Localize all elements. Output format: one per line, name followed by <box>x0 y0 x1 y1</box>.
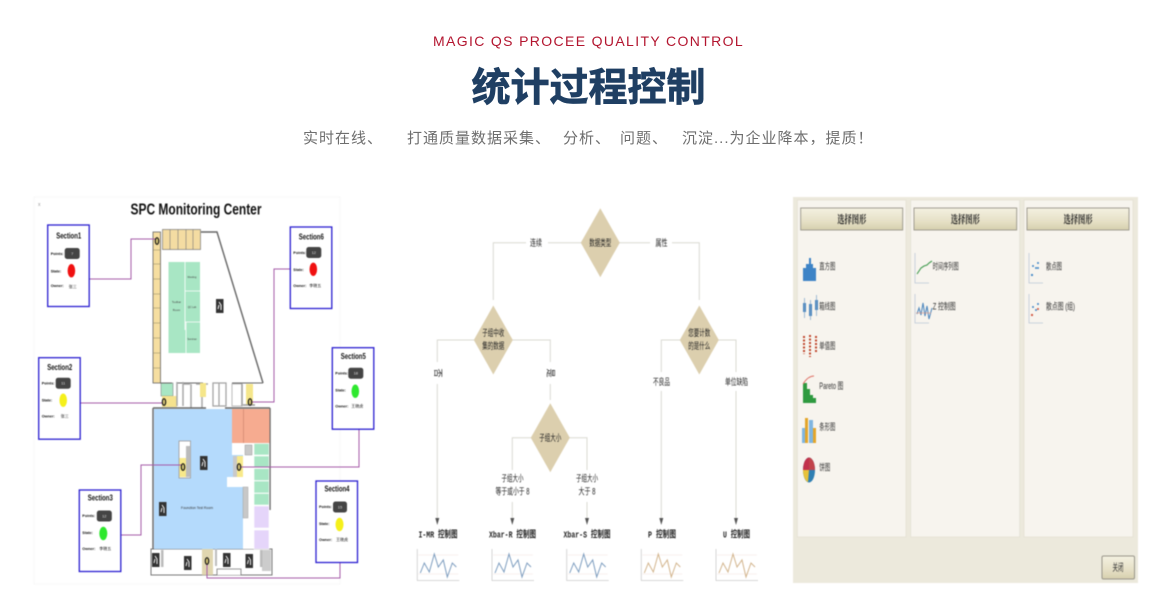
card: Section6: 12 <box>312 250 317 255</box>
icon: individual value plot <box>804 335 816 357</box>
icon: Pareto chart <box>803 383 816 403</box>
chart titles: U 控制图 <box>723 528 750 540</box>
card: Section3: Points: <box>82 514 95 518</box>
tagline: 沉淀...为企业降本，提质！ <box>682 129 874 147</box>
main title: 统计过程控制 <box>471 67 706 110</box>
lower floor <box>151 549 272 575</box>
card: Section2: Points: <box>42 382 55 386</box>
card: Section3: Section3 <box>88 492 113 502</box>
panel: SPC monitoring center <box>34 197 374 584</box>
card: Section1: Owner: <box>51 284 64 288</box>
card: Section6: Points: <box>293 251 306 255</box>
card: Section5: State: <box>335 389 346 393</box>
card: Section4: Points: <box>319 505 332 509</box>
icon: box plot <box>803 295 818 320</box>
column: distribution charts: 直方图 <box>819 260 835 272</box>
decision labels <box>433 237 748 496</box>
decision diamonds <box>474 208 719 472</box>
column: scatter charts: 选择图形 <box>1064 212 1092 226</box>
card: Section1: Section1 <box>56 230 81 240</box>
floor plan: Meeting <box>188 276 197 279</box>
decision labels: 不良品 <box>653 376 670 387</box>
column: time charts: 时间序列图 <box>933 260 959 272</box>
chart titles: I-MR 控制图 <box>418 528 458 540</box>
column: scatter charts: 散点图 <box>1046 260 1062 272</box>
column: time charts: 选择图形 <box>951 212 980 226</box>
decision labels: 子组大小 <box>539 432 561 443</box>
column: distribution charts <box>797 200 906 537</box>
card: Section4: Owner: <box>319 538 332 542</box>
column: distribution charts: 条形图 <box>819 421 835 432</box>
decision labels: 否 <box>433 368 443 378</box>
card: Section1: 张三 <box>69 283 77 289</box>
label gaps <box>432 236 751 502</box>
icon: control chart <box>915 294 929 323</box>
panel: control chart decision tree <box>417 208 758 580</box>
sensor markers <box>155 238 252 564</box>
middle corridor rooms <box>161 383 173 396</box>
mini chart: Xbar-S <box>567 549 609 580</box>
mini chart: I-MR <box>417 549 459 580</box>
card: Section2: 11 <box>61 381 66 386</box>
tagline: 实时在线、 <box>303 130 383 147</box>
tagline: 打通质量数据采集、 <box>407 130 551 147</box>
card: Section3: 李晓五 <box>99 545 111 551</box>
card: Section5: 王晓虎 <box>351 403 363 409</box>
close button <box>1102 556 1134 579</box>
card: Section5: Points: <box>335 372 348 376</box>
panel: chart type selector <box>793 197 1138 583</box>
chart titles: Xbar-S 控制图 <box>564 528 610 540</box>
card: Section4: State: <box>319 522 330 526</box>
card: Section1 <box>48 225 89 306</box>
card: Section4 <box>316 481 358 562</box>
icon: bar chart <box>802 418 816 443</box>
card: Section3: State: <box>82 531 93 535</box>
floor plan: QC Lab <box>188 306 197 309</box>
monitoring title: SPC Monitoring Center <box>130 202 262 218</box>
mini chart: P <box>641 549 683 580</box>
floor plan: Room <box>173 308 181 312</box>
icon: scatter <box>1029 253 1043 283</box>
card: Section2 <box>39 358 80 439</box>
card: Section6: State: <box>293 268 304 272</box>
column: distribution charts: 箱线图 <box>819 300 835 312</box>
card: Section1: State: <box>51 270 61 274</box>
card: Section5: Section5 <box>341 351 366 361</box>
column: distribution charts: 饼图 <box>819 462 830 472</box>
arrowheads <box>435 518 738 525</box>
header <box>303 33 874 147</box>
card: Section6: Owner: <box>293 284 306 288</box>
floor plan: Founction Test Room <box>181 506 213 510</box>
card: Section2: Section2 <box>47 362 72 372</box>
card: Section4: 王晓虎 <box>336 536 348 542</box>
card: Section6: Section6 <box>299 232 324 242</box>
floor plan: Toolbar <box>172 300 181 304</box>
decision labels: 您要计数 <box>688 327 710 338</box>
decision labels: 子组中收 <box>482 327 504 338</box>
decision labels: 的是什么 <box>688 340 710 351</box>
mini chart: Xbar-R <box>492 549 534 580</box>
icon: time series <box>915 253 929 283</box>
column: time charts <box>911 200 1020 537</box>
column: scatter charts <box>1024 200 1133 537</box>
card: Section4: Section4 <box>324 484 350 494</box>
column: scatter charts: 散点图 (组) <box>1046 300 1075 312</box>
connector lines <box>437 243 736 522</box>
card: Section1: Points: <box>51 252 64 256</box>
card: Section1: 7 <box>71 251 74 256</box>
icon: pie chart <box>803 458 815 482</box>
card: Section5 <box>332 348 374 429</box>
bottom stair block <box>202 549 213 575</box>
card: Section3: 12 <box>102 514 107 518</box>
floor plan: Seminar <box>187 338 197 341</box>
column: distribution charts: 选择图形 <box>837 212 866 226</box>
chart titles: Xbar-R 控制图 <box>489 528 536 540</box>
mini chart: U <box>716 549 758 580</box>
connector lines <box>80 239 359 578</box>
card: Section2: Owner: <box>42 415 55 419</box>
column: distribution charts: 单值图 <box>819 340 835 351</box>
icon: histogram <box>803 258 816 281</box>
decision labels: 属性 <box>656 237 668 248</box>
panel: SPC monitoring center: x <box>38 202 41 208</box>
card: Section3: Owner: <box>82 547 95 551</box>
chart titles: P 控制图 <box>648 528 676 540</box>
decision labels: 集的数据 <box>482 340 504 351</box>
column: distribution charts: Pareto 图 <box>819 381 843 391</box>
decision labels: 单位缺陷 <box>725 376 748 387</box>
icon: grouped scatter <box>1029 294 1043 323</box>
tagline: 分析、 <box>563 130 611 147</box>
card: Section6 <box>290 227 332 308</box>
decision labels: 等于或小于 8 <box>496 486 530 496</box>
decision labels: 是 <box>546 368 556 378</box>
tagline: 问题、 <box>620 130 668 147</box>
decision labels: 连续 <box>530 237 542 248</box>
card: Section3 <box>79 490 121 572</box>
floor plan <box>151 230 272 575</box>
card: Section5: Owner: <box>335 405 348 409</box>
core blocks in blue room <box>179 441 190 478</box>
chart titles <box>418 528 750 540</box>
decision labels: 子组大小 <box>502 472 524 484</box>
close button: 关闭 <box>1112 561 1124 574</box>
decision labels: 数据类型 <box>589 237 611 248</box>
card: Section5: 18 <box>354 371 359 376</box>
card: Section2: 张三 <box>61 413 69 419</box>
decision labels: 子组大小 <box>576 472 598 484</box>
subtitle in English: MAGIC QS PROCEE QUALITY CONTROL <box>433 33 744 49</box>
card: Section2: State: <box>42 399 52 403</box>
exit icons <box>200 456 208 470</box>
card: Section6: 李晓五 <box>309 282 321 288</box>
card: Section4: 15 <box>338 504 343 510</box>
decision labels: 大于 8 <box>578 486 596 496</box>
column: time charts: Z 控制图 <box>933 300 956 312</box>
